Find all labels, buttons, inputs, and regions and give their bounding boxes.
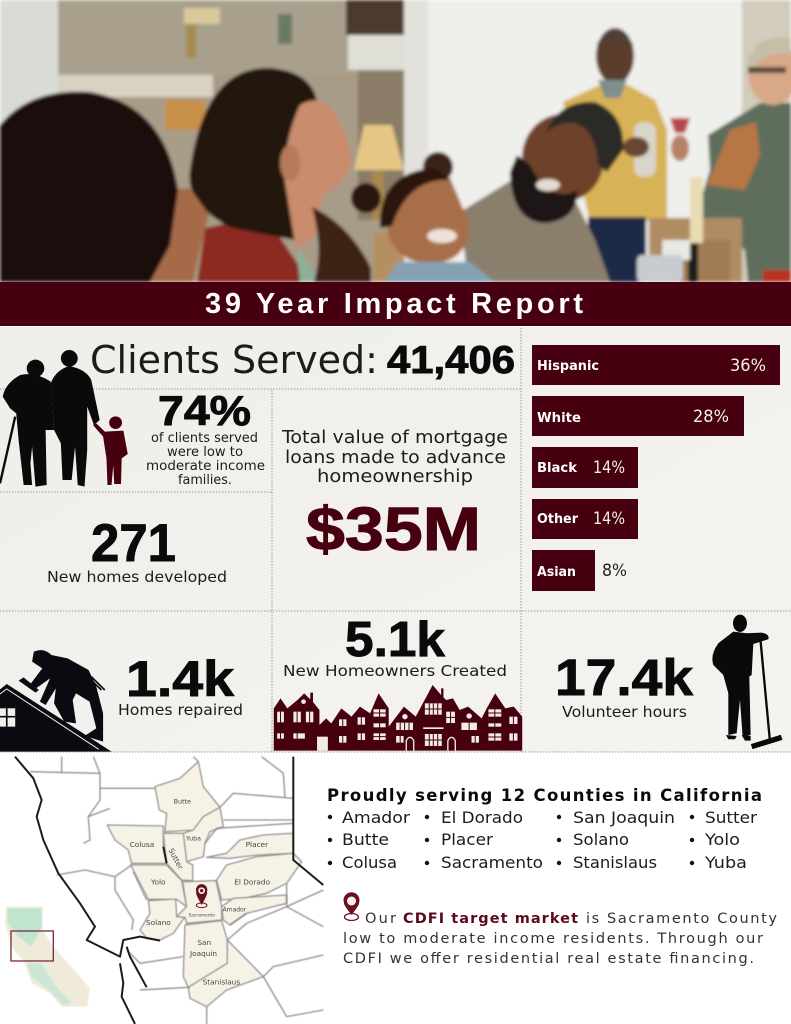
bar: Black: Black [537,461,577,476]
county labels: Solano [146,918,171,927]
county list: Sacramento [441,853,543,872]
county labels: Placer [246,840,269,849]
icon: roofer silhouette [0,650,112,752]
stat: 74 percent [146,387,265,488]
bar: Asian: Asian [537,565,576,580]
text block: CDFI target market [343,911,777,967]
stat: mortgage loans value: $35M [306,495,481,563]
stat: new homeowners created: 5.1k [345,613,446,667]
text block: CDFI target market: low to moderate income residents. Through our [343,931,763,947]
coastline and state border [15,757,323,1024]
text block: CDFI target market: Our [365,911,396,927]
heading: counties served: Proudly serving 12 Counties in California [327,786,762,805]
county list: San Joaquin [573,808,675,827]
county list: Yuba [704,853,747,872]
bar: Hispanic: Hispanic [537,359,599,374]
bar: Other: 14% [593,509,625,529]
bar: Other: Other [537,512,579,527]
stat: new homes developed: 271 [91,514,176,573]
icon: CDFI pin [343,892,360,920]
bar: White: 28% [693,407,729,427]
county labels: Sacramento [189,912,215,918]
bar: Other [532,499,638,539]
bar: White [532,396,744,436]
stat: mortgage loans value: Total value of mortgage [281,427,508,448]
county list: El Dorado [441,808,523,827]
county labels: Butte [174,798,191,805]
bar: Black: 14% [593,458,625,478]
stat: volunteer hours: 17.4k [555,649,694,706]
county labels [130,798,271,987]
stat: homes repaired: 1.4k [126,651,234,707]
county labels: Colusa [130,840,154,849]
girl [351,183,381,213]
county list: Butte [342,830,389,849]
icon: family silhouette [0,350,128,487]
man [460,178,610,282]
county list: Sutter [705,808,757,827]
county fills [107,762,302,1007]
stat: 74 percent: were low to [167,445,243,460]
county list: Solano [573,830,629,849]
icon: Sacramento pin [196,884,207,908]
bar: Asian [532,550,627,591]
county boundaries [30,757,323,1024]
heading: clients served: Clients Served: [90,338,378,382]
text block: CDFI target market: CDFI we offer residential real estate financing. [343,951,754,967]
heading: clients served: 41,406 [387,339,515,382]
map: service area counties [0,753,323,1024]
bar: Black [532,447,638,488]
list bullets [328,815,694,865]
bar: White: White [537,411,581,426]
county labels: Amador [223,907,247,914]
icon: volunteer with broom [712,615,782,747]
stat: mortgage loans value: loans made to advance [285,447,506,468]
county labels: Stanislaus [203,978,240,987]
county labels: Sutter [167,847,186,872]
stat: homes repaired: Homes repaired [118,701,243,719]
older woman [696,103,791,282]
text block: CDFI target market: CDFI target market [403,911,578,927]
stat: mortgage loans value [281,427,508,563]
bar: Asian: 8% [602,561,627,581]
stat: new homeowners created: New Homeowners Created [283,662,507,680]
county list: Yolo [704,830,740,849]
icon: row of houses [274,685,522,751]
older man [563,85,667,222]
title banner: 39 Year Impact Report [205,288,583,320]
county labels: El Dorado [234,877,271,886]
stat: homes repaired [118,651,243,719]
county list: Stanislaus [573,853,657,872]
stat: 74 percent: of clients served [151,431,258,446]
county labels: Yuba [185,836,201,843]
stat: new homeowners created [283,613,507,680]
stat: volunteer hours: Volunteer hours [562,703,687,721]
county list: Colusa [342,853,397,872]
county labels: San [197,938,211,947]
stat: new homes developed [47,514,227,586]
text block: CDFI target market: is Sacramento County [586,911,777,927]
title banner [0,282,791,326]
stat: 74 percent: moderate income [146,459,265,474]
chair, candle and glasses [649,218,742,282]
stat: mortgage loans value: homeownership [317,466,473,487]
curly-haired woman [148,186,212,282]
bar: Hispanic [532,345,780,385]
heading: clients served [90,338,515,382]
stat: 74 percent: 74% [158,387,251,434]
bar chart: client demographics [532,345,780,591]
county list [328,808,757,872]
county labels: Yolo [150,877,166,886]
county list: Placer [441,830,493,849]
photo: family gathering [0,0,791,282]
stat: 74 percent: families. [178,473,232,488]
county labels: Joaquin [189,949,217,958]
woman in red [196,220,302,282]
county list: Amador [342,808,410,827]
stat: new homes developed: New homes developed [47,568,227,586]
bar: Hispanic: 36% [730,356,766,376]
stats panel background [0,327,791,752]
inset: California locator map [5,907,90,1007]
